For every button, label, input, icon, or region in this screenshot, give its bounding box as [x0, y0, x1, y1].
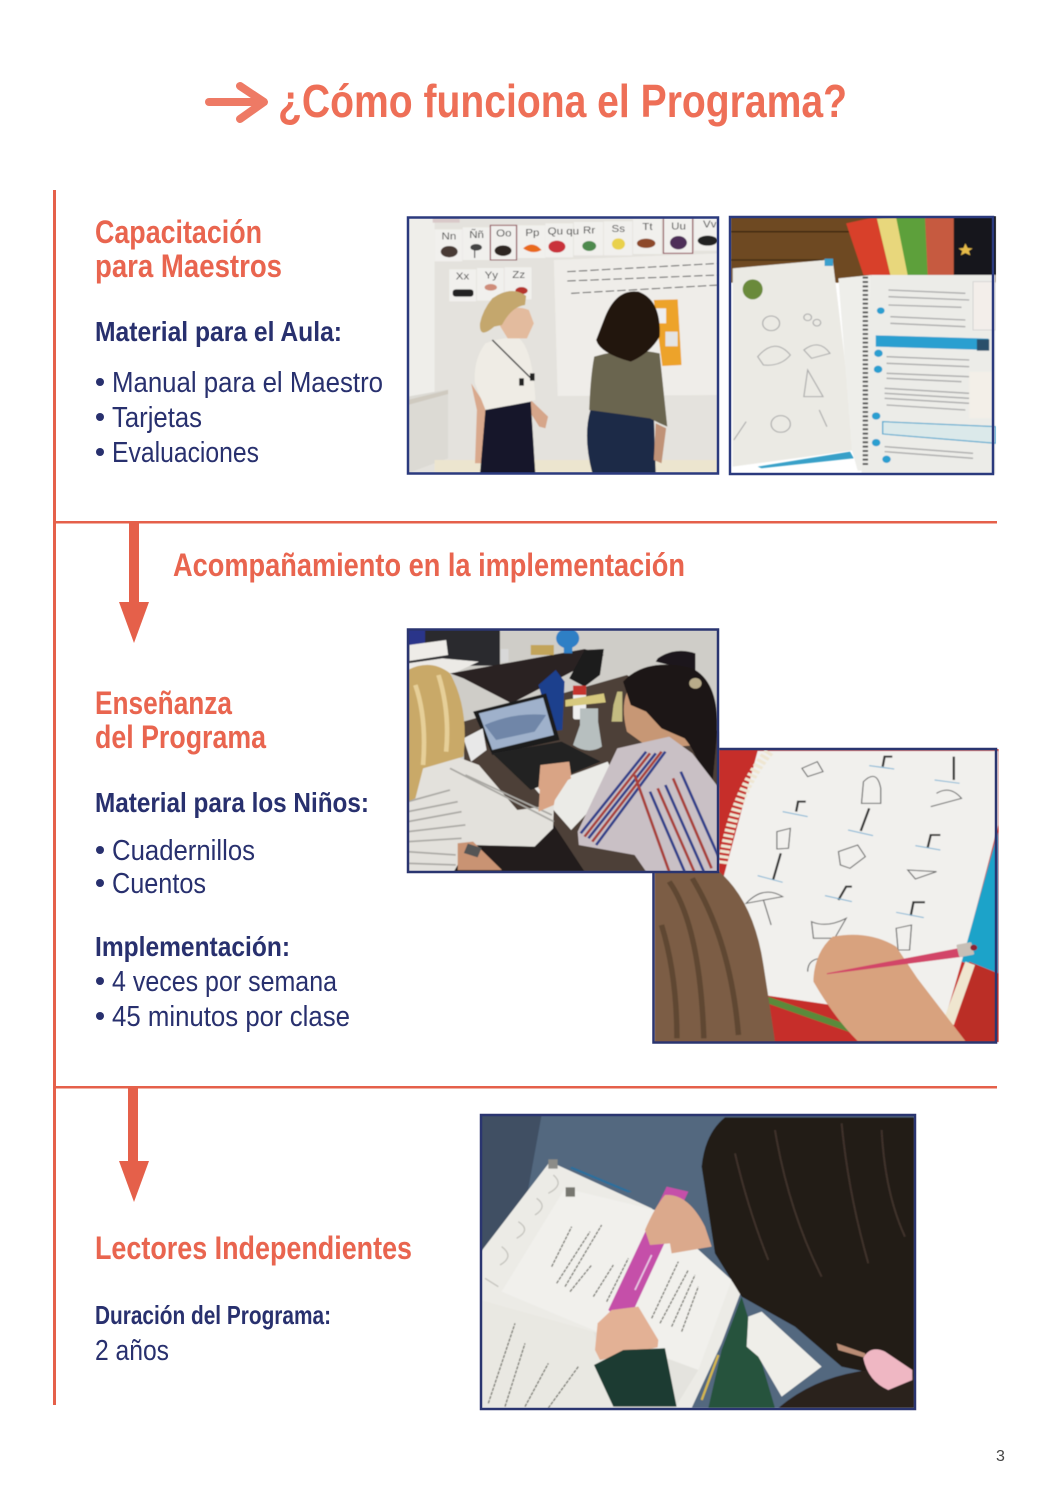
list: material niños: Cuadernillos	[112, 835, 255, 867]
arrow: to lectores	[119, 1087, 149, 1202]
heading: enseñanza: Enseñanza	[95, 685, 232, 721]
subheading: material niños: Material para los Niños:	[95, 787, 369, 818]
page number: 3	[996, 1448, 1005, 1465]
photo: teachers at the alphabet wall: Yy	[485, 270, 499, 281]
list: implementación: 45 minutos por clase	[112, 1001, 350, 1033]
photo: teachers at the alphabet wall: Qu qu	[548, 226, 579, 237]
photo: teachers at the alphabet wall: Uu	[671, 221, 686, 232]
photo: teachers at the alphabet wall	[408, 217, 719, 474]
subheading: implementación: Implementación:	[95, 931, 290, 962]
heading: capacitación: para Maestros	[95, 248, 282, 284]
photo: notebooks and teacher manual	[730, 216, 996, 474]
vertical timeline line	[53, 190, 56, 1405]
panel: capacitación text	[95, 214, 383, 469]
photo: teachers at the alphabet wall: Ss	[612, 224, 625, 235]
text: duration: 2 años	[95, 1335, 169, 1367]
list: materiales: Tarjetas	[112, 402, 202, 434]
list: implementación	[96, 966, 350, 1033]
heading: capacitación	[95, 214, 282, 284]
heading: enseñanza	[95, 685, 266, 755]
panel: lectores text	[95, 1230, 412, 1367]
photo: teachers at the alphabet wall: Ññ	[469, 229, 484, 241]
photo: teachers with a laptop	[408, 628, 719, 872]
list: material niños	[96, 835, 255, 900]
photo: teachers at the alphabet wall: Nn	[442, 231, 456, 242]
list: materiales: Evaluaciones	[112, 437, 259, 469]
photo: teachers at the alphabet wall: Vv	[703, 219, 717, 230]
photo: teachers at the alphabet wall: Rr	[583, 225, 596, 236]
photo: child reading with ruler	[481, 1115, 915, 1409]
heading: enseñanza: del Programa	[95, 719, 266, 755]
photo: teachers at the alphabet wall: Oo	[496, 228, 512, 239]
list: materiales: Manual para el Maestro	[112, 367, 383, 399]
heading: capacitación: Capacitación	[95, 214, 262, 250]
photo: teachers at the alphabet wall: Pp	[525, 228, 539, 239]
list: implementación: 4 veces por semana	[112, 966, 338, 998]
arrow: to enseñanza	[119, 522, 149, 643]
list: materiales	[96, 367, 383, 469]
photo: teachers at the alphabet wall: Zz	[512, 270, 525, 281]
heading: lectores independientes: Lectores Independientes	[95, 1230, 412, 1266]
title: ¿Cómo funciona el Programa?	[278, 75, 847, 127]
subheading: duración: Duración del Programa:	[95, 1300, 331, 1330]
photo: teachers at the alphabet wall: Xx	[456, 271, 470, 282]
photo: teachers at the alphabet wall: Tt	[642, 222, 653, 233]
list: material niños: Cuentos	[112, 868, 206, 900]
panel: enseñanza text	[95, 685, 369, 1033]
subheading: material aula: Material para el Aula:	[95, 316, 342, 347]
photo: child writing in workbook	[654, 749, 999, 1042]
heading: acompañamiento: Acompañamiento en la implementación	[173, 547, 685, 583]
icon: title arrow	[209, 86, 264, 119]
